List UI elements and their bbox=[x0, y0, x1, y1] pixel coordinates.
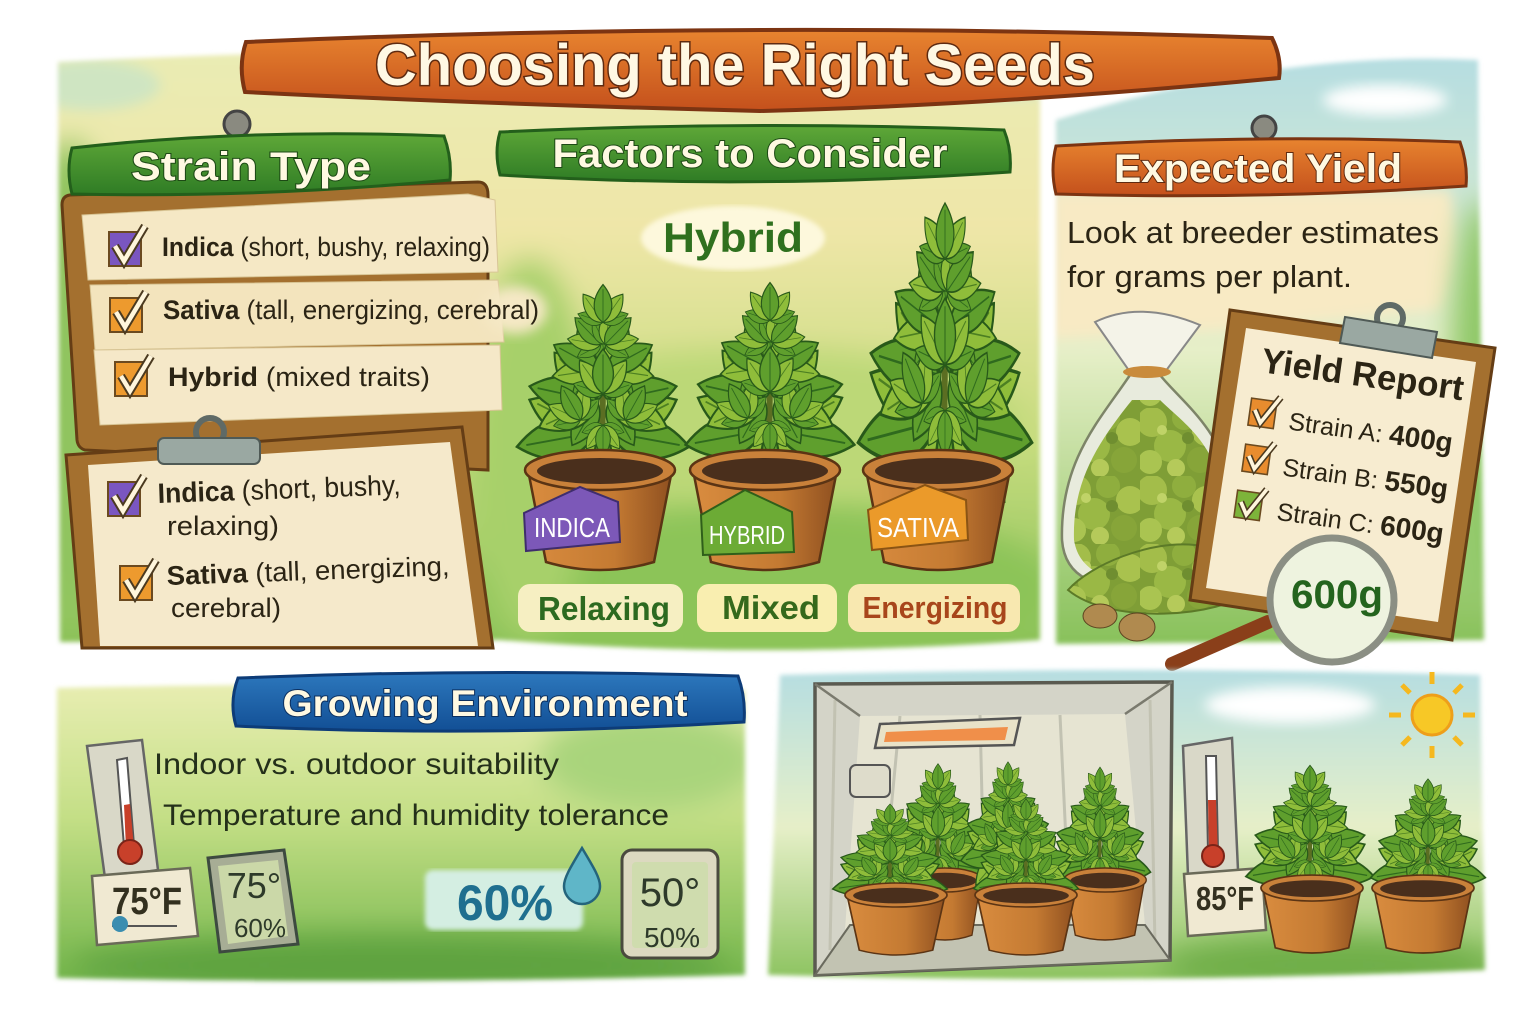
list row: hybrid: Hybrid (mixed traits) bbox=[168, 362, 430, 392]
effect label: mixed: Mixed bbox=[722, 589, 820, 626]
plant: indica in pot bbox=[507, 285, 699, 570]
panel: expected yield background bbox=[1050, 50, 1510, 650]
tent control unit bbox=[850, 765, 890, 797]
outdoor plants bbox=[1238, 765, 1492, 953]
list item: sativa: cerebral) bbox=[171, 593, 281, 623]
hybrid label: Hybrid bbox=[663, 214, 803, 261]
readout: 75 / 60%: 75° bbox=[227, 865, 281, 906]
readout: 75F card bbox=[92, 868, 198, 945]
plant: hybrid in pot bbox=[676, 283, 864, 570]
heading: expected yield: Expected Yield bbox=[1114, 147, 1402, 191]
list item: sativa bbox=[120, 551, 450, 623]
grow tent bbox=[815, 682, 1172, 975]
list item: indica: relaxing) bbox=[167, 511, 279, 541]
icon: thermometer bbox=[87, 740, 158, 878]
list row: sativa: Sativa (tall, energizing, cerebral) bbox=[163, 295, 539, 325]
strain type heading bbox=[69, 111, 450, 195]
readout: 75F card: 75°F bbox=[112, 881, 182, 923]
readout: 50 / 50% bbox=[622, 850, 718, 958]
plant: sativa in pot bbox=[848, 203, 1042, 570]
tag: hybrid: HYBRID bbox=[709, 520, 785, 550]
panel: indoor and outdoor scene bbox=[760, 665, 1500, 995]
list row: indica: Indica (short, bushy, relaxing) bbox=[162, 232, 490, 262]
icon: sun bbox=[1389, 672, 1475, 758]
panel: lower clipboard bbox=[66, 418, 493, 648]
icon: bag of buds bbox=[1062, 312, 1252, 641]
list row: hybrid bbox=[94, 345, 502, 425]
heading: growing environment: Growing Environment bbox=[282, 683, 688, 724]
tag: indica bbox=[524, 487, 620, 551]
text: breeder estimates: Look at breeder estimates bbox=[1067, 215, 1439, 250]
effect label: energizing bbox=[848, 584, 1020, 632]
effect label: relaxing: Relaxing bbox=[538, 590, 670, 627]
text: tolerance: Temperature and humidity tolerance bbox=[163, 799, 669, 832]
clip bbox=[1340, 305, 1437, 358]
effect label: energizing: Energizing bbox=[862, 590, 1008, 625]
readout: 75 / 60% bbox=[208, 850, 298, 952]
panel: growing environment bbox=[50, 672, 760, 995]
hybrid label bbox=[641, 206, 825, 270]
clipboard back bbox=[62, 182, 488, 470]
readout: 85F bbox=[1184, 868, 1266, 936]
list item: indica: Indica (short, bushy, bbox=[157, 470, 401, 509]
row: strain b bbox=[1241, 439, 1451, 505]
list item: indica bbox=[108, 470, 401, 541]
text: breeder estimates: for grams per plant. bbox=[1067, 259, 1352, 294]
readout: 50 / 50%: 50% bbox=[644, 922, 700, 953]
tag: indica: INDICA bbox=[534, 512, 610, 543]
tag: sativa bbox=[868, 485, 968, 550]
grow light bbox=[875, 718, 1020, 748]
tag: hybrid bbox=[701, 490, 794, 555]
list row: sativa bbox=[90, 280, 547, 350]
strain type heading: Strain Type bbox=[131, 145, 371, 189]
clipboard: yield report bbox=[1190, 305, 1495, 640]
list row: indica bbox=[82, 194, 498, 280]
title banner: Choosing the Right Seeds bbox=[375, 33, 1095, 98]
heading: factors to consider: Factors to Consider bbox=[552, 132, 948, 176]
readout: 75 / 60%: 60% bbox=[234, 913, 286, 943]
list item: sativa: Sativa (tall, energizing, bbox=[166, 551, 450, 591]
readout: 50 / 50%: 50° bbox=[640, 871, 700, 915]
text: breeder estimates bbox=[1067, 215, 1439, 294]
row: strain c bbox=[1233, 485, 1446, 549]
yield report heading: Yield Report bbox=[1259, 341, 1467, 408]
panel: strain type clipboards bbox=[62, 111, 547, 470]
heading: growing environment bbox=[233, 672, 744, 731]
title banner bbox=[242, 30, 1280, 111]
icon: magnifying glass 600g bbox=[1172, 538, 1394, 664]
plant group bbox=[826, 762, 1157, 955]
row: strain c: Strain C: 600g bbox=[1275, 495, 1446, 549]
icon: magnifying glass 600g: 600g bbox=[1291, 573, 1383, 617]
panel: main background bbox=[54, 52, 1044, 654]
icon: outdoor thermometer bbox=[1183, 738, 1238, 876]
humidity 60% with drop bbox=[425, 848, 600, 931]
row: strain b: Strain B: 550g bbox=[1281, 451, 1450, 505]
clip bbox=[158, 418, 260, 464]
row: strain a bbox=[1247, 393, 1456, 458]
row: strain a: Strain A: 400g bbox=[1287, 405, 1455, 458]
effect label: mixed bbox=[697, 584, 837, 632]
effect label: relaxing bbox=[518, 584, 683, 632]
text: suitability: Indoor vs. outdoor suitability bbox=[154, 748, 559, 781]
heading: factors to consider bbox=[497, 125, 1010, 182]
tag: sativa: SATIVA bbox=[877, 512, 959, 543]
humidity 60% with drop: 60% bbox=[457, 875, 553, 931]
readout: 85F: 85°F bbox=[1196, 880, 1254, 917]
heading: expected yield bbox=[1053, 116, 1466, 196]
